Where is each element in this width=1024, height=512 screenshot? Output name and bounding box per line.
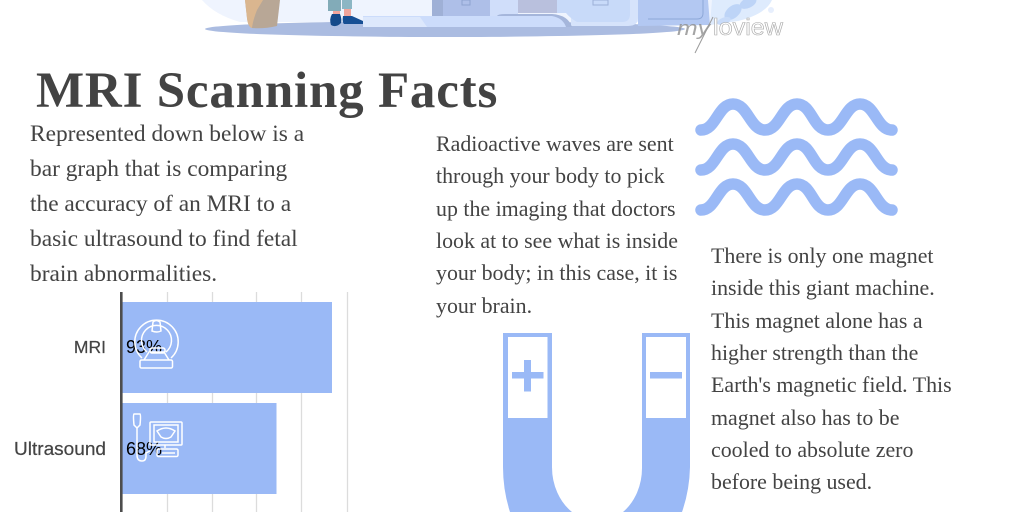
text block: bar graph description: brain abnormalities.	[30, 261, 217, 287]
text block: magnet facts: inside this giant machine.	[711, 275, 935, 300]
text block: bar graph description	[30, 121, 304, 287]
watermark: myloview: my	[677, 18, 711, 40]
bar chart: MRI vs ultrasound accuracy: Ultrasound	[14, 439, 106, 459]
title: MRI Scanning Facts	[36, 62, 498, 118]
text block: radioactive waves: through your body to pick	[436, 163, 665, 188]
text block: bar graph description: basic ultrasound to find fetal	[30, 226, 298, 252]
text block: radioactive waves: look at to see what is inside	[436, 228, 678, 253]
text block: magnet facts: This magnet alone has a	[711, 308, 923, 333]
icon: MRI scanner	[135, 320, 178, 368]
text block: magnet facts: There is only one magnet	[711, 243, 934, 268]
plant pot	[245, 0, 280, 28]
illustration: MRI room banner cropped at the top	[202, 0, 774, 37]
text block: radioactive waves: Radioactive waves are sent	[436, 131, 674, 156]
bar chart: MRI vs ultrasound accuracy: MRI	[74, 337, 106, 357]
text block: magnet facts: Earth's magnetic field. This	[711, 372, 952, 397]
person legs	[328, 0, 341, 11]
text block: magnet facts	[711, 243, 952, 494]
icon: ultrasound machine	[134, 414, 182, 461]
watermark: myloview: loview	[713, 14, 783, 40]
text block: magnet facts: higher strength than the	[711, 340, 918, 365]
bar chart: MRI vs ultrasound accuracy	[14, 292, 348, 512]
text block: magnet facts: cooled to absolute zero	[711, 437, 913, 462]
watermark: myloview	[677, 14, 784, 54]
text block: radioactive waves: up the imaging that doctors	[436, 196, 676, 221]
text block: radioactive waves: your brain.	[436, 292, 532, 318]
bar chart: MRI vs ultrasound accuracy: 93%	[126, 337, 162, 357]
text block: radioactive waves	[436, 131, 678, 318]
text block: radioactive waves: your body; in this case, it is	[436, 260, 677, 285]
text block: bar graph description: Represented down below is a	[30, 121, 304, 147]
text block: magnet facts: magnet also has to be	[711, 404, 899, 430]
bar chart: MRI vs ultrasound accuracy: 68%	[126, 439, 162, 459]
text block: magnet facts: before being used.	[711, 469, 872, 494]
text block: bar graph description: bar graph that is comparing	[30, 156, 287, 182]
text block: bar graph description: the accuracy of an MRI to a	[30, 191, 291, 217]
